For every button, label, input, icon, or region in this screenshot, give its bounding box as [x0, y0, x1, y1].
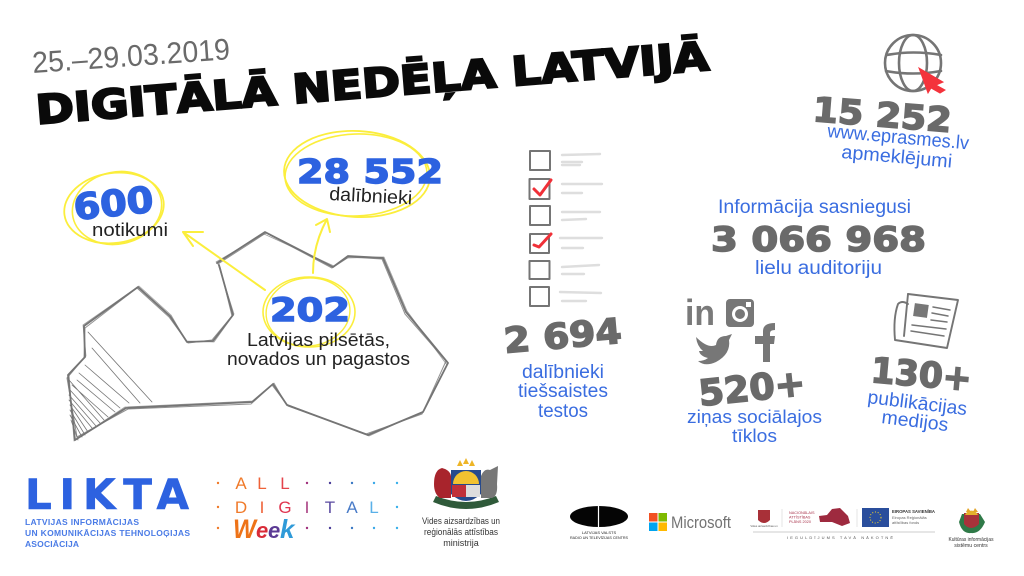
- label online tests: testos: [538, 401, 588, 422]
- label online tests: dalībnieki: [522, 362, 604, 383]
- logo: All Digital Week: e: [256, 518, 268, 543]
- icon: facebook: [755, 323, 775, 362]
- yellow ring 202: [263, 274, 355, 350]
- logo: All Digital Week: A: [235, 474, 247, 493]
- label social: [687, 407, 822, 446]
- logo: LVRTC: RADIO UN TELEVĪZIJAS CENTRS: [570, 535, 628, 540]
- label places: [227, 330, 410, 369]
- logo: national development plan and EU: Vides aizsardzības un: [750, 524, 778, 528]
- arrow: 202 to 28 552: [313, 219, 330, 273]
- logo: national development plan and EU: ATTĪSTĪBAS: [789, 516, 811, 520]
- logo: All Digital Week: L: [369, 498, 379, 517]
- logo: national development plan and EU: NACIONĀLAIS: [789, 511, 815, 515]
- logo: Microsoft: [649, 513, 731, 532]
- label publications: publikācijas: [866, 387, 968, 420]
- icon: newspaper: [894, 294, 958, 348]
- icon: globe with cursor: [885, 35, 945, 93]
- number 2 694: 2 694: [502, 312, 623, 362]
- arrow: 202 to 600: [183, 232, 265, 290]
- logo: All Digital Week: A: [346, 498, 358, 517]
- number 15 252: 15 252: [811, 90, 953, 141]
- logo: LIKTA: LATVIJAS INFORMĀCIJAS: [25, 517, 139, 527]
- logo: LIKTA: LIKTA: [25, 470, 189, 519]
- panel: audience reach: [711, 197, 926, 279]
- heading reach: Informācija sasniegusi: [718, 197, 911, 218]
- number 130+: 130+: [869, 351, 973, 400]
- logo: national development plan and EU: EIROPAS SAVIENĪBA: [892, 509, 935, 514]
- date: 25.–29.03.2019: [31, 33, 231, 80]
- number 600: 600: [72, 180, 156, 229]
- logo: culture information systems centre: sistēmu centrs: [954, 543, 988, 549]
- icon: instagram: [726, 299, 754, 327]
- logo: LIKTA: ASOCIĀCIJA: [25, 539, 79, 549]
- logo: LIKTA: UN KOMUNIKĀCIJAS TEHNOLOĢIJAS: [25, 528, 190, 538]
- label notikumi: notikumi: [92, 220, 168, 240]
- logo: All Digital Week: W: [233, 514, 258, 544]
- label online tests: tiešsaistes: [518, 381, 608, 402]
- logo: national development plan and EU: attīstības fonds: [892, 520, 919, 525]
- panel: media publications: [866, 294, 973, 436]
- label website visits: apmeklējumi: [841, 142, 953, 173]
- label publications: medijos: [880, 407, 949, 436]
- callout: 600 events: [60, 163, 169, 253]
- title: DIGITĀLĀ NEDĒĻA LATVIJĀ: [34, 32, 711, 134]
- panel: social networks: [685, 292, 822, 446]
- logo: All Digital Week: e: [268, 518, 280, 543]
- logo: All Digital Week: D: [235, 498, 247, 517]
- number 3 066 968: 3 066 968: [711, 220, 926, 260]
- number 202: 202: [270, 291, 350, 329]
- number 520+: 520+: [697, 363, 807, 415]
- logo: All Digital Week: L: [280, 474, 290, 493]
- logo: environment ministry: Vides aizsardzības un: [422, 516, 500, 526]
- panel: online tests: [502, 151, 623, 422]
- logo: LIKTA: [25, 470, 190, 549]
- logo: All Digital Week: I: [260, 498, 264, 517]
- logo: national development plan and EU: IEGULDĪJUMS TAVĀ NĀKOTNĒ: [787, 535, 893, 540]
- icon: checklist: [530, 151, 602, 306]
- logo: All Digital Week: [217, 474, 398, 544]
- logo: Microsoft: Microsoft: [671, 514, 731, 532]
- label online tests: [518, 362, 608, 422]
- logo: All Digital Week: I: [305, 498, 309, 517]
- yellow ring 28 552: [282, 127, 432, 221]
- logo: national development plan and EU: PLĀNS 2020: [789, 520, 811, 524]
- logo: culture information systems centre: [948, 508, 994, 549]
- logo: environment ministry: reģionālās attīstības: [424, 527, 498, 537]
- icon: linkedin: in: [685, 292, 715, 333]
- logo: national development plan and EU: [750, 508, 935, 540]
- label places: Latvijas pilsētās,: [247, 330, 390, 350]
- label places: novados un pagastos: [227, 349, 410, 369]
- logo: environment ministry: [422, 458, 500, 548]
- icon: twitter: [696, 334, 732, 364]
- label social: ziņas sociālajos: [687, 407, 822, 427]
- logo: environment ministry: ministrija: [443, 538, 479, 548]
- label dalībnieki: dalībnieki: [329, 184, 413, 209]
- map hatching: [69, 332, 152, 440]
- logo: All Digital Week: G: [278, 498, 292, 517]
- logo: LVRTC: [570, 505, 628, 540]
- label website visits: www.eprasmes.lv: [826, 121, 970, 154]
- label publications: [866, 387, 968, 436]
- logo: All Digital Week: L: [257, 474, 267, 493]
- callout: 202 places: [227, 274, 410, 369]
- panel: website visits: [811, 35, 970, 173]
- logo: All Digital Week: k: [280, 514, 296, 544]
- yellow ring 600: [60, 163, 169, 253]
- number 28 552: 28 552: [297, 152, 443, 191]
- label website visits: [826, 121, 970, 173]
- callout: 28 552 participants: [282, 127, 443, 221]
- label social: tīklos: [732, 426, 777, 446]
- map of Latvia sketch: [67, 232, 448, 441]
- coat of arms: [433, 458, 499, 509]
- logo: All Digital Week: T: [325, 498, 335, 517]
- logo: national development plan and EU: Eiropas Reģionālās: [892, 515, 927, 520]
- logo: LVRTC: LATVIJAS VALSTS: [582, 530, 616, 535]
- label audience: lielu auditoriju: [755, 258, 882, 279]
- logo: culture information systems centre: Kultūras informācijas: [948, 537, 994, 543]
